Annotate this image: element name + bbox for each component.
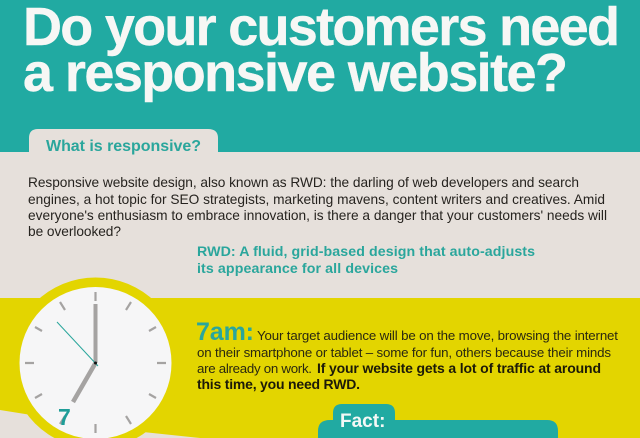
- second hand: [57, 322, 98, 366]
- clock ticks: [25, 292, 166, 433]
- clock label 7: 7: [58, 404, 71, 430]
- paragraph: If your website gets a lot of traffic at around: [317, 360, 601, 376]
- minute hand: [94, 304, 98, 363]
- paragraph: this time, you need RWD.: [197, 376, 360, 392]
- title: [23, 0, 620, 103]
- icon: clock: [10, 278, 181, 438]
- paragraph: are already on work.: [197, 361, 312, 376]
- heading: fact: Fact:: [340, 411, 385, 432]
- paragraph: on their smartphone or tablet – some for fun, others because their minds: [197, 345, 611, 360]
- title: a responsive website?: [23, 43, 568, 103]
- RWD definition: [197, 244, 535, 277]
- intro text: [28, 175, 607, 239]
- RWD definition: its appearance for all devices: [197, 261, 398, 277]
- RWD definition: RWD: A fluid, grid-based design that auto-adjusts: [197, 244, 535, 260]
- panel: what is responsive: [0, 129, 640, 298]
- paragraph: [197, 328, 618, 392]
- 7am text: [196, 318, 618, 392]
- heading: what is responsive: What is responsive?: [46, 138, 201, 155]
- intro text: Responsive website design, also known as RWD: the darling of web developers and search: [28, 175, 579, 190]
- panel: yellow 7am band: [0, 298, 640, 438]
- paragraph: Your target audience will be on the move, browsing the internet: [257, 328, 618, 343]
- 7am text: 7am:: [196, 318, 254, 346]
- panel: grey background: [0, 110, 640, 438]
- panel: teal header: [0, 0, 640, 152]
- panel: fact: [318, 404, 558, 438]
- intro text: be overlooked?: [28, 224, 121, 239]
- hour hand: [73, 363, 96, 402]
- intro text: engines, a hot topic for SEO strategists, marketing mavens, content writers and creatives. Amid: [28, 192, 605, 207]
- intro text: everyone's enthusiasm to embrace innovation, is there a danger that your customers' needs will: [28, 208, 607, 223]
